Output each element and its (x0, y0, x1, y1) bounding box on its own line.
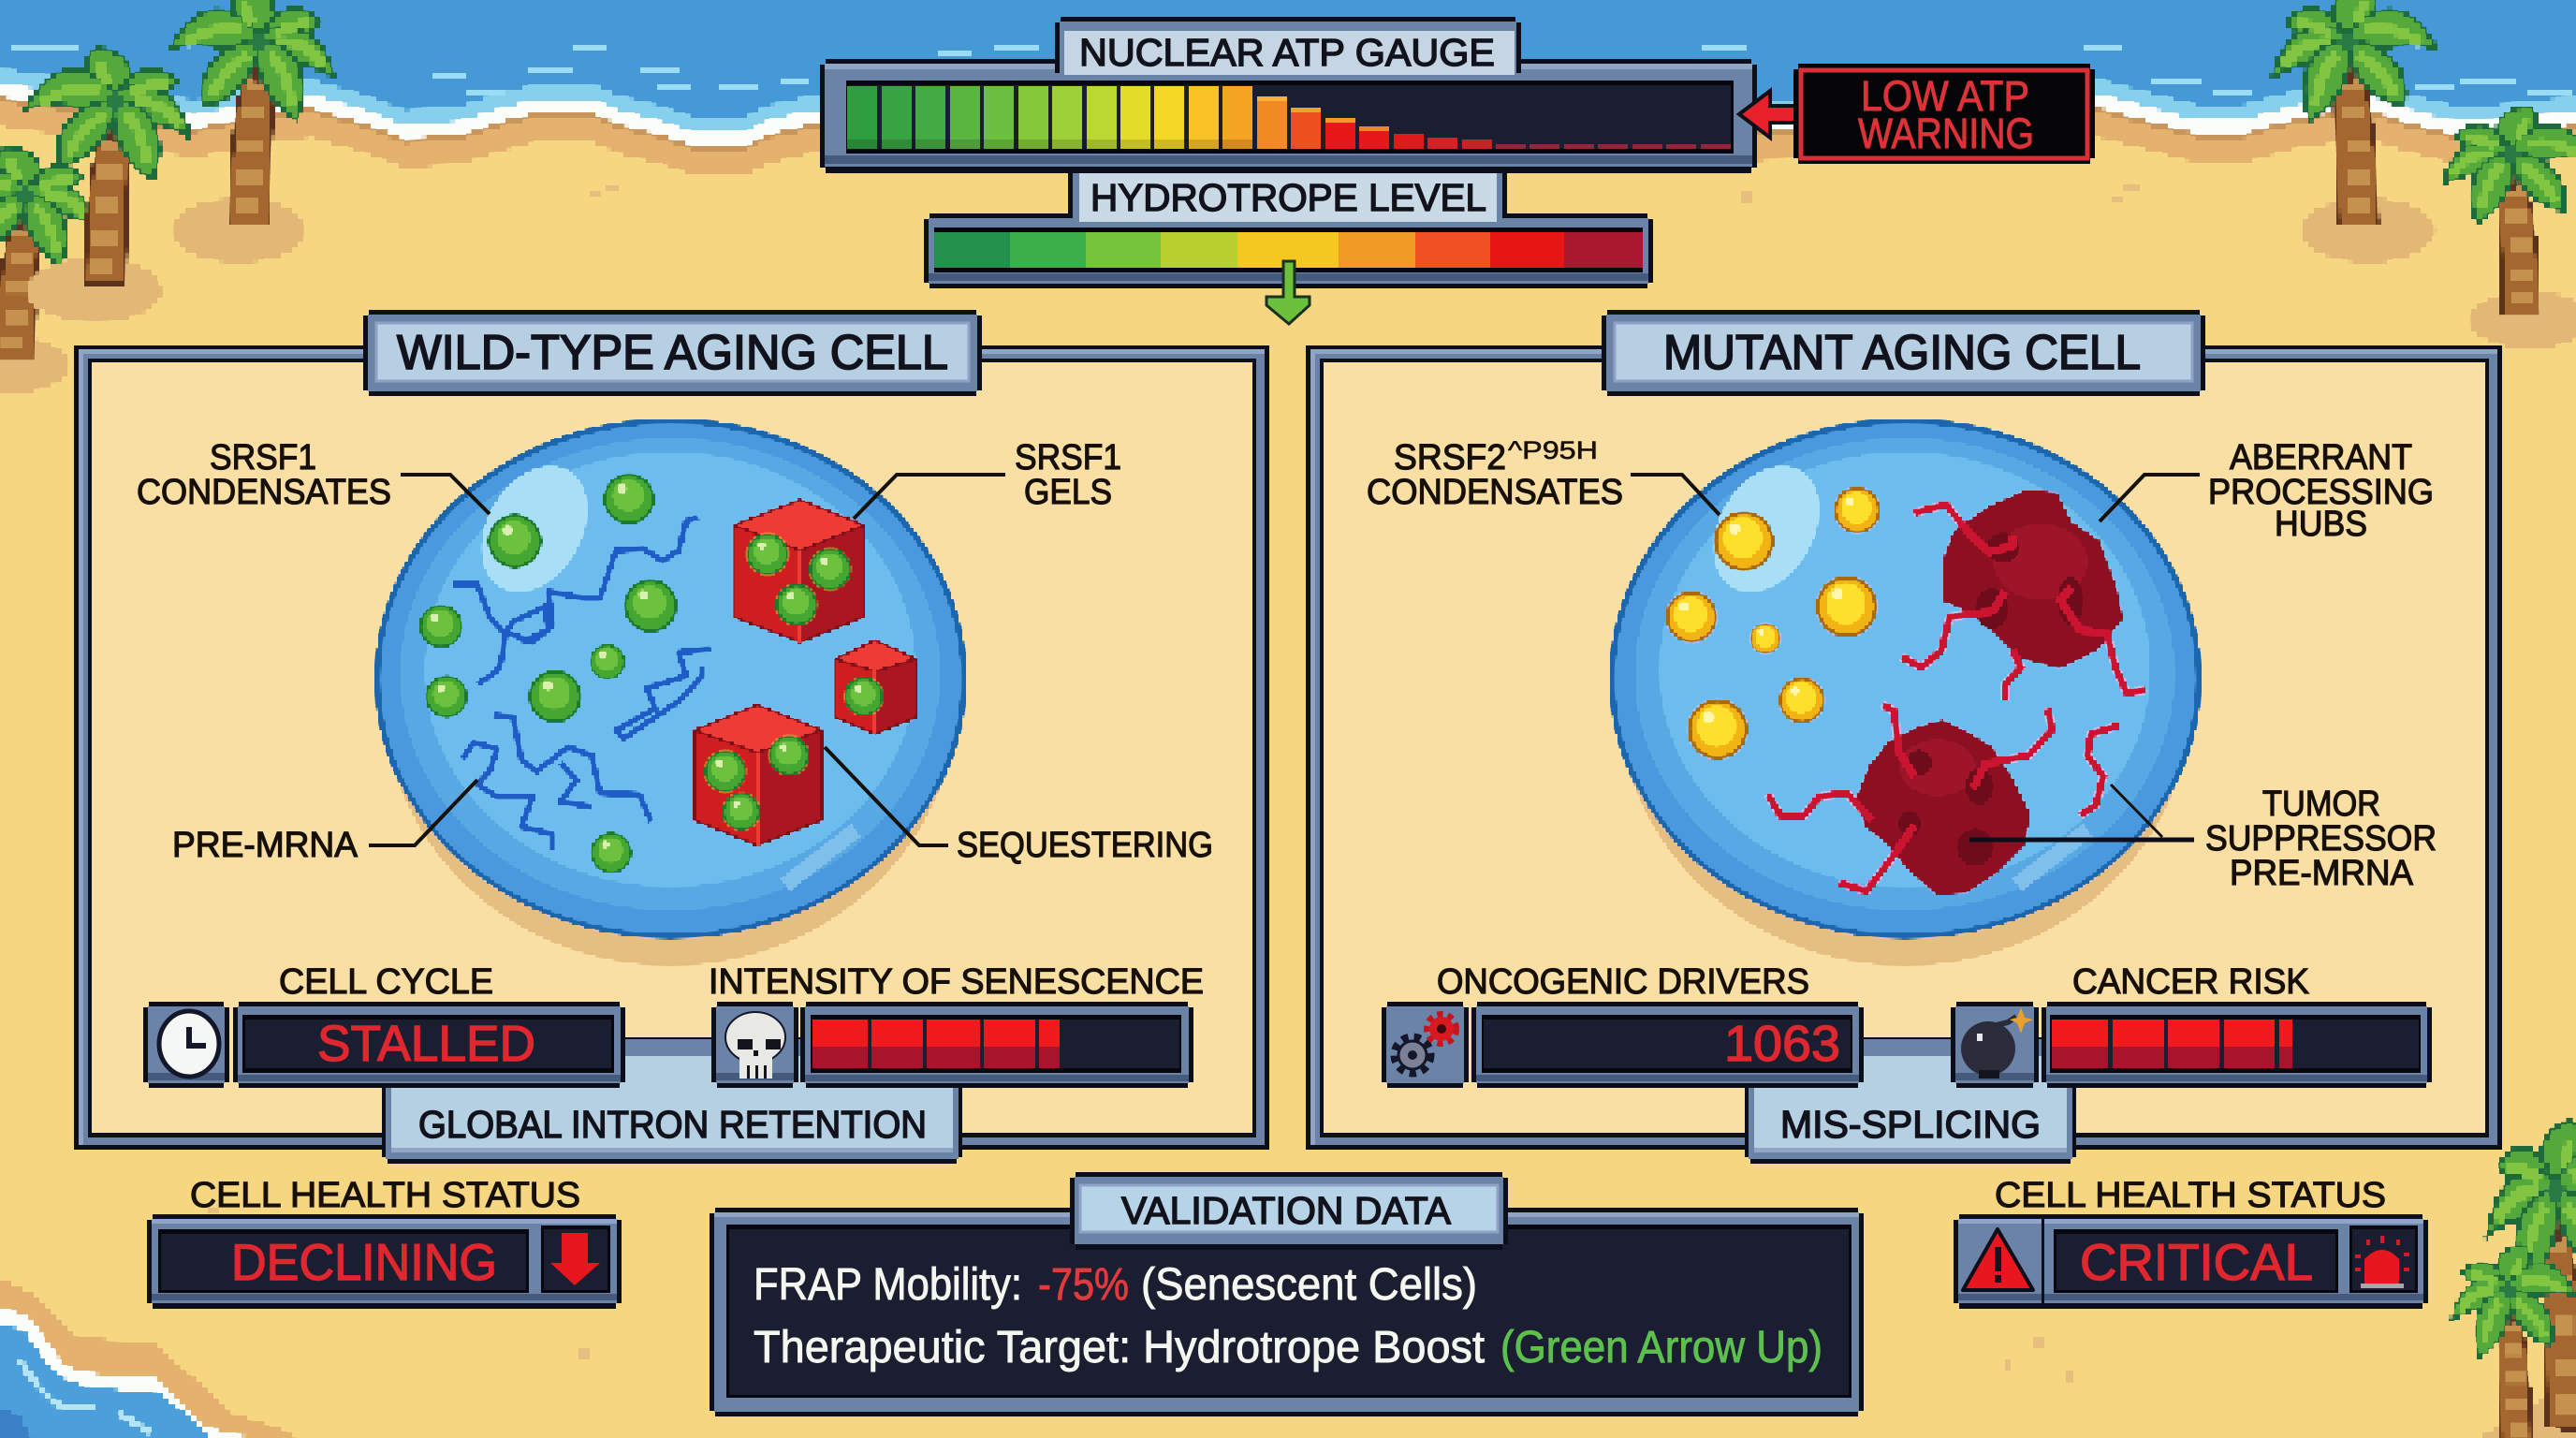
bar chart: senescence level (812, 1020, 1060, 1068)
label: pre-mRNA (172, 780, 477, 865)
tab: validation data: VALIDATION DATA (1121, 1189, 1452, 1232)
label: SRSF2 P95H condensates: ^P95H (1508, 436, 1598, 464)
label: aberrant processing hubs (2100, 438, 2434, 544)
panel: nuclear ATP gauge (820, 17, 1757, 173)
icon: siren (2355, 1236, 2409, 1288)
label: aberrant processing hubs: ABERRANT (2230, 438, 2412, 477)
label: tumor suppressor pre-mRNA: SUPPRESSOR (2205, 819, 2437, 858)
label: tumor suppressor pre-mRNA (1969, 785, 2437, 893)
aberrant processing hub, bottom (1768, 705, 2052, 891)
yellow SRSF2 condensate droplets (1665, 487, 1881, 759)
SRSF1 gel cube, bottom (695, 705, 822, 845)
heading: hydrotrope level: HYDROTROPE LEVEL (1090, 176, 1486, 219)
stat: intensity of senescence (709, 962, 1204, 1088)
panel: mutant aging cell (1306, 310, 2502, 1164)
tab: global intron retention: GLOBAL INTRON RETENTION (418, 1103, 927, 1146)
label: SRSF1 gels: GELS (1024, 473, 1112, 512)
SRSF1 gel cube, top (734, 500, 864, 642)
icon: palm tree, far right (2442, 108, 2576, 348)
sea in the lower-left corner (0, 1278, 300, 1438)
icon: palm tree, bottom right back (2486, 1122, 2576, 1438)
label: tumor suppressor pre-mRNA: TUMOR (2262, 785, 2380, 824)
panel: hydrotrope level bar (924, 173, 1653, 288)
bar chart: ATP level segments (847, 86, 1731, 149)
tab: global intron retention (382, 1037, 962, 1164)
tab: mis-splicing: MIS-SPLICING (1780, 1103, 2041, 1146)
title tab: mutant aging cell (1602, 310, 2205, 396)
icon: red down arrow (550, 1233, 600, 1285)
title tab: mutant aging cell: MUTANT AGING CELL (1663, 326, 2141, 380)
icon: bomb (1951, 1002, 2039, 1088)
icon: palm tree, upper left (170, 0, 334, 263)
text: therapeutic target: Therapeutic Target: Hydrotrope Boost (754, 1323, 1485, 1372)
sand specks (206, 183, 2142, 1385)
title tab: wild-type aging cell (363, 310, 982, 396)
status: left cell health declining: CELL HEALTH STATUS (190, 1176, 580, 1215)
stat: intensity of senescence: INTENSITY OF SENESCENCE (709, 962, 1204, 1002)
tab: mis-splicing (1745, 1037, 2076, 1164)
title tab: wild-type aging cell: WILD-TYPE AGING CELL (397, 326, 948, 380)
aberrant processing hub, top (1902, 493, 2146, 701)
label: SRSF1 condensates: SRSF1 (210, 438, 316, 477)
icon: palm tree, bottom right front (2452, 1245, 2576, 1438)
icon: palm tree, far left (0, 148, 96, 394)
label: aberrant processing hubs: PROCESSING (2208, 473, 2434, 512)
label: SRSF2 P95H condensates: CONDENSATES (1367, 473, 1623, 512)
cell: wild-type nucleus illustration (374, 418, 966, 965)
status: right cell health critical: CRITICAL (2080, 1233, 2313, 1291)
label: SRSF1 gels: SRSF1 (1015, 438, 1121, 477)
chart: hydrotrope colour scale (934, 232, 1643, 268)
stat: cell cycle stalled: CELL CYCLE (279, 962, 493, 1002)
SRSF1 condensate droplets (419, 473, 678, 873)
stat: oncogenic drivers: ONCOGENIC DRIVERS (1437, 962, 1809, 1002)
arrow: hydrotrope level pointer (1266, 261, 1310, 324)
status: left cell health declining (147, 1176, 622, 1309)
label: SRSF2 P95H condensates (1367, 436, 1720, 515)
status: right cell health critical: CELL HEALTH STATUS (1995, 1176, 2386, 1215)
panel: wild-type aging cell (74, 310, 1269, 1164)
label: SRSF1 condensates: CONDENSATES (137, 473, 391, 512)
icon: clock (143, 1002, 229, 1088)
icon: skull (711, 1002, 798, 1088)
tumor suppressor pre-mRNA strand (2080, 726, 2119, 815)
stat: oncogenic drivers (1382, 962, 1864, 1088)
label: tumor suppressor pre-mRNA: PRE-MRNA (2230, 854, 2414, 893)
icon: warning triangle (1963, 1229, 2033, 1290)
label: aberrant processing hubs: HUBS (2275, 505, 2367, 544)
stat: oncogenic drivers: 1063 (1724, 1016, 1840, 1072)
label: SRSF1 gels (854, 438, 1121, 519)
text: FRAP mobility (754, 1260, 1477, 1310)
icon: gears (1382, 1002, 1469, 1088)
text: FRAP mobility: -75% (1038, 1260, 1129, 1310)
panel: validation data (710, 1172, 1864, 1416)
label: pre-mRNA: PRE-MRNA (172, 826, 359, 865)
label: sequestering (825, 747, 1213, 865)
icon: palm tree, left (26, 49, 190, 323)
tab: validation data (1070, 1172, 1508, 1250)
stat: cell cycle stalled: STALLED (317, 1016, 535, 1072)
status: right cell health critical (1954, 1176, 2428, 1309)
bar chart: cancer risk level (2052, 1020, 2292, 1068)
heading: nuclear ATP gauge: NUCLEAR ATP GAUGE (1079, 31, 1495, 74)
label: SRSF1 condensates (137, 438, 490, 514)
icon: palm tree, upper right (2273, 0, 2437, 263)
label: sequestering: SEQUESTERING (957, 826, 1213, 865)
stat: cancer risk (1951, 962, 2432, 1088)
text: FRAP mobility: (Senescent Cells) (1141, 1260, 1477, 1310)
callout: low ATP warning with arrow: WARNING (1858, 110, 2034, 157)
label: SRSF2 P95H condensates: SRSF2 (1394, 438, 1506, 477)
callout: low ATP warning with arrow (1739, 64, 2095, 164)
stat: cell cycle stalled (143, 962, 625, 1088)
stat: cancer risk: CANCER RISK (2072, 962, 2309, 1002)
text: FRAP mobility: FRAP Mobility: (754, 1260, 1022, 1310)
status: left cell health declining: DECLINING (231, 1233, 497, 1291)
SRSF1 gel cube, small (835, 640, 916, 734)
text: therapeutic target: (Green Arrow Up) (1500, 1323, 1822, 1372)
cell: mutant nucleus illustration (1610, 418, 2202, 965)
callout: low ATP warning with arrow: LOW ATP (1861, 72, 2029, 120)
pre-mRNA strands (454, 517, 710, 851)
